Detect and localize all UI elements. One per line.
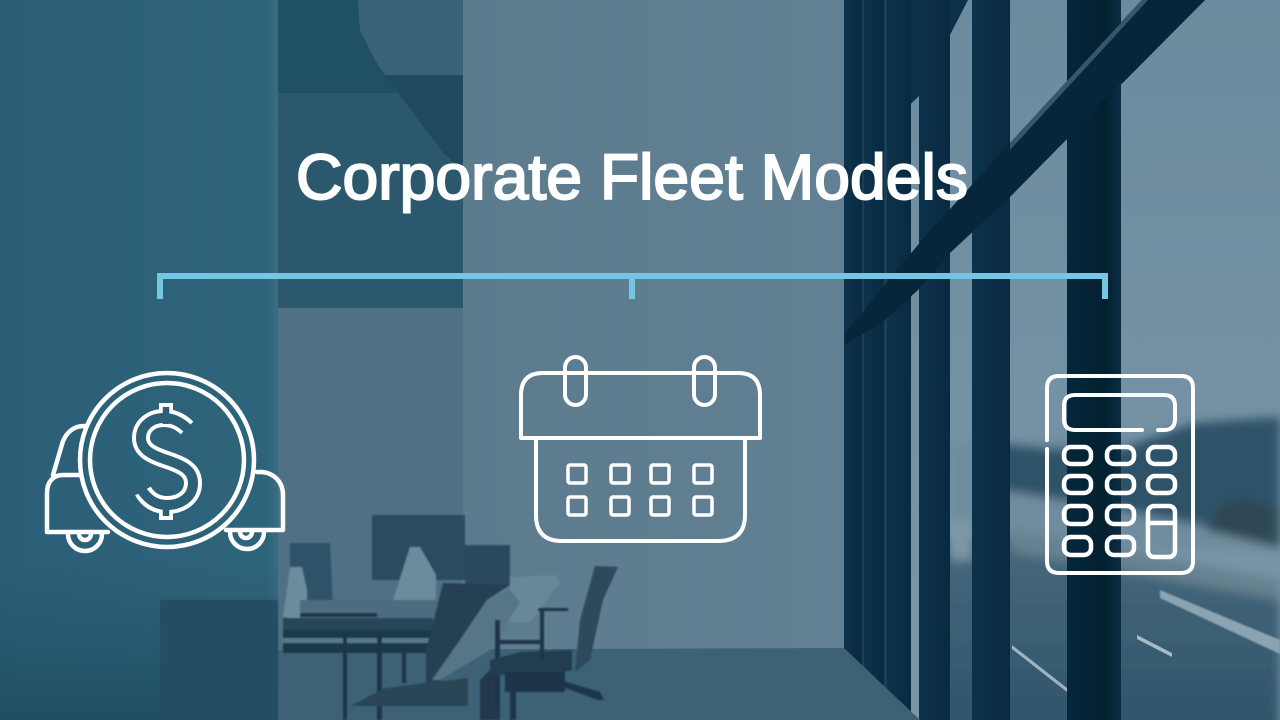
background: window view with hills and road bbox=[844, 0, 1280, 720]
icon detail: calculator keys bbox=[1064, 447, 1175, 557]
background: window frames bbox=[844, 0, 1205, 720]
icon: calculator bbox=[1047, 376, 1193, 573]
background: desks and chairs bbox=[283, 515, 618, 720]
title: Corporate Fleet Models bbox=[296, 141, 968, 213]
icon: calendar bbox=[521, 357, 760, 541]
icon: car with dollar coin bbox=[47, 373, 283, 551]
bracket connector bbox=[160, 276, 1105, 299]
icon detail: calendar date cells bbox=[568, 465, 712, 515]
icon detail: outlined dollar sign bbox=[141, 403, 193, 520]
